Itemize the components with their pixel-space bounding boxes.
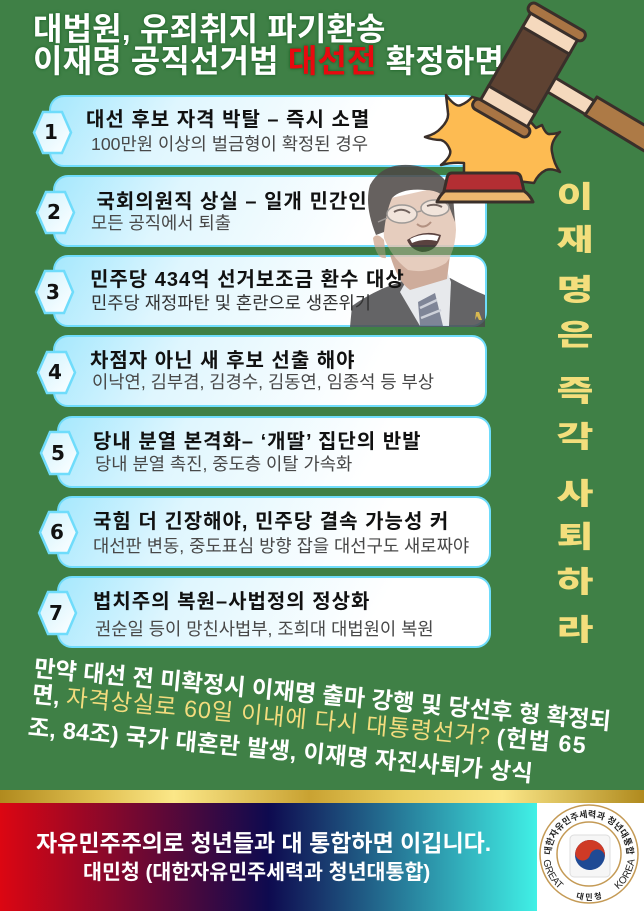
gavel sound block <box>437 173 533 202</box>
panel: item 2 <box>53 175 487 247</box>
vertical slogan: 라 <box>557 613 593 647</box>
vertical slogan: 은 <box>557 318 593 352</box>
logo seal: GREAT <box>544 860 564 888</box>
footer banner: 대민청 (대한자유민주세력과 청년대통합) <box>83 861 430 884</box>
panel: item 1: 대선 후보 자격 박탈 – 즉시 소멸 <box>86 108 370 130</box>
badge 2: 2 <box>47 200 61 224</box>
logo seal: 대 민 청 <box>576 892 602 901</box>
panel: item 6: 대선판 변동, 중도표심 방향 잡을 대선구도 새로짜야 <box>93 536 469 556</box>
vertical slogan: 퇴 <box>557 520 593 554</box>
logo seal: 대한자유민주세력과 청년대통합 <box>544 810 634 854</box>
vertical slogan: 재 <box>557 223 593 257</box>
title: 대법원, 유죄취지 파기환송 <box>33 11 386 47</box>
text: item 3 over photo: 민주당 434억 선거보조금 환수 대상 <box>90 269 405 291</box>
vertical slogan: 사 <box>557 477 593 511</box>
badge 7: 7 <box>49 601 63 625</box>
panel: item 5: 당내 분열 본격화– ‘개딸’ 집단의 반발 <box>93 430 422 452</box>
panel: item 4: 차점자 아닌 새 후보 선출 해야 <box>90 350 356 372</box>
panel: item 7: 법치주의 복원–사법정의 정상화 <box>93 590 370 612</box>
vertical slogan: 명 <box>557 273 593 307</box>
badge 5 <box>41 432 78 474</box>
title: 이재명 공직선거법 대선전 확정하면 <box>33 43 504 79</box>
panel: item 7: 권순일 등이 망친사법부, 조희대 대법원이 복원 <box>95 618 434 638</box>
badge 7 <box>39 592 76 634</box>
text: item 3 over photo <box>90 269 405 313</box>
vertical slogan: 각 <box>557 420 593 454</box>
badge 6 <box>40 512 77 553</box>
vertical slogan <box>557 180 593 647</box>
badge 5: 5 <box>51 441 65 465</box>
vertical slogan: 즉 <box>557 374 593 408</box>
panel: item 1 <box>49 95 481 167</box>
panel: item 2: 모든 공직에서 퇴출 <box>91 212 231 232</box>
tilted warning paragraph: 만약 대선 전 미확정시 이재명 출마 강행 및 당선후 형 확정되 <box>33 655 612 734</box>
panel: item 4: 이낙연, 김부겸, 김경수, 김동연, 임종석 등 부상 <box>92 372 434 392</box>
gavel head <box>471 1 587 139</box>
vertical slogan: 하 <box>557 565 593 599</box>
panel: item 3 <box>53 255 487 327</box>
badge 4 <box>38 352 75 393</box>
panel: item 1: 100만원 이상의 벌금형이 확정된 경우 <box>91 134 368 154</box>
logo seal: KOREA <box>614 860 635 889</box>
badge 3: 3 <box>46 280 60 304</box>
tie pin ribbon <box>475 312 482 320</box>
logo seal <box>537 803 644 911</box>
tilted warning paragraph: 면, 자격상실로 60일 이내에 다시 대통령선거? (헌법 65 <box>31 681 588 758</box>
panel: item 4 <box>53 335 487 407</box>
panel: item 5 <box>57 416 491 488</box>
tilted warning paragraph <box>27 655 612 787</box>
gold divider bar <box>0 790 644 803</box>
title <box>33 11 504 79</box>
badge 3 <box>36 271 73 313</box>
footer banner <box>0 803 537 911</box>
badge 1: 1 <box>44 120 58 144</box>
photo: smiling man in suit <box>350 164 485 327</box>
footer banner: 자유민주주의로 청년들과 대 통합하면 이깁니다. <box>36 830 491 856</box>
text: item 3 over photo: 민주당 재정파탄 및 혼란으로 생존위기 <box>91 293 371 313</box>
tilted warning paragraph: 조, 84조) 국가 대혼란 발생, 이재명 자진사퇴가 상식 <box>27 714 534 787</box>
impact burst <box>425 95 560 183</box>
vertical slogan: 이 <box>557 180 593 214</box>
gavel handle <box>546 77 644 152</box>
badge 6: 6 <box>50 520 64 544</box>
panel: item 6 <box>57 496 491 568</box>
badge 4: 4 <box>48 360 62 384</box>
panel: item 6: 국힘 더 긴장해야, 민주당 결속 가능성 커 <box>93 510 449 532</box>
heading: item 2 over photo: 국회의원직 상실 – 일개 민간인 <box>96 191 368 213</box>
badge 2 <box>37 192 74 233</box>
badge 1 <box>34 112 71 153</box>
panel: item 5: 당내 분열 촉진, 중도층 이탈 가속화 <box>95 454 352 474</box>
panel: item 7 <box>57 576 491 648</box>
